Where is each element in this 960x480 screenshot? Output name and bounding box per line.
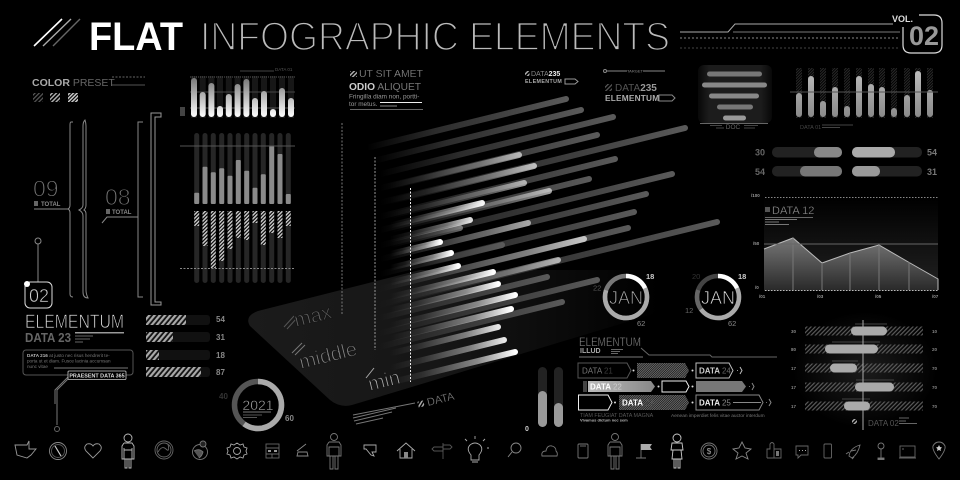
icon: laptop: [899, 446, 916, 458]
total 09: TOTAL: [41, 202, 61, 208]
hatched horizontal bars: 18: [216, 351, 225, 360]
donut jan 1: 18: [646, 272, 654, 281]
icon: cloud: [542, 446, 557, 456]
floating range chart: 17: [791, 385, 797, 390]
totals with brackets: [33, 113, 161, 305]
data235 small: ELEMENTUM: [525, 79, 562, 85]
icon: man figure 2: [608, 434, 622, 469]
icon: map: [15, 441, 36, 458]
volume badge: [680, 14, 942, 53]
volume badge: VOL.: [892, 14, 913, 24]
total 08: TOTAL: [112, 210, 132, 216]
text block: ut sit amet: [349, 68, 424, 110]
two-way pill bars: 30: [755, 148, 765, 158]
area chart: /50: [753, 241, 760, 246]
callout: DATA 216 at justo nec risus hendrerit te-: [27, 353, 110, 358]
icon: rocket: [846, 445, 860, 459]
arrow flow diagram: Vivamus dictum nec sem: [580, 418, 628, 422]
right bar chart: [790, 68, 938, 131]
data235 large: DATA235: [615, 83, 657, 94]
floating range chart: [791, 312, 938, 430]
text block: ut sit amet: UT SIT AMET: [359, 68, 424, 80]
icon: woman figure 1: [122, 434, 134, 468]
vertical gauges: [525, 367, 563, 433]
donut jan 2: 20: [692, 272, 700, 281]
area chart: /03: [817, 294, 824, 299]
right bar chart: DATA 01: [800, 125, 821, 131]
title: INFOGRAPHIC ELEMENTS: [200, 15, 670, 59]
label: max: max: [292, 301, 334, 332]
target marker: [604, 68, 665, 74]
hatched horizontal bars: 54: [216, 315, 225, 324]
icon: globe with pin: [192, 441, 208, 460]
callout: nunc vitae: [27, 364, 48, 369]
text block: ut sit amet: tor metus.: [349, 101, 378, 108]
elementum block: DATA 23: [25, 331, 71, 345]
icon: signpost: [432, 443, 452, 459]
floating range chart: 70: [932, 404, 938, 409]
floating range chart: 30: [791, 329, 797, 334]
floating range chart: 17: [791, 404, 797, 409]
elementum block: ELEMENTUM: [25, 312, 124, 333]
donut 2021: 2021: [242, 397, 274, 413]
color preset: [32, 77, 145, 102]
floating range chart: 70: [932, 385, 938, 390]
area chart: /0: [755, 285, 759, 290]
data235 small: [525, 71, 578, 85]
elementum illud heading: ILLUD: [580, 348, 601, 355]
hatched horizontal bars: 31: [216, 333, 225, 342]
icon: city: [767, 442, 781, 458]
diagonal bright bars: [390, 155, 584, 383]
icon: dollar: $: [707, 447, 712, 456]
donut jan 1: [593, 272, 654, 328]
arrow flow diagram: DATA 25: [699, 398, 731, 408]
donut 2021: 40: [219, 392, 228, 401]
icon: magnifier: [508, 443, 521, 457]
diagonal dark bars: [367, 99, 717, 347]
color preset: COLOR PRESET: [32, 77, 115, 89]
icon: house: [397, 443, 415, 458]
icon: light bulb: [465, 436, 489, 462]
callout: PRAESENT DATA 365: [69, 373, 125, 379]
title: FLAT: [89, 15, 183, 59]
donut jan 2: [685, 272, 746, 328]
icon: building: [266, 444, 279, 458]
floating range chart: 10: [932, 329, 938, 334]
arrow flow diagram: [578, 363, 771, 422]
callout: porta ut et diam. Fusce lacinia accumsan: [27, 358, 111, 364]
donut jan 1: JAN: [609, 288, 643, 308]
icon: man figure 1: [327, 434, 341, 469]
donut 2021: [219, 382, 294, 428]
area chart: /100: [751, 193, 760, 198]
icon: pin marker: [878, 443, 884, 460]
icon: woman figure 2: [671, 434, 683, 468]
icon: hand 2: [364, 445, 376, 456]
funnel chart doc: DOC: [726, 124, 741, 131]
platform: max middle min: [248, 270, 700, 406]
icon: compass: [50, 442, 66, 460]
funnel chart doc: [698, 65, 772, 131]
two-way pill bars: 31: [927, 167, 937, 177]
floating range chart: DATA 02: [868, 419, 899, 428]
donut jan 2: 18: [738, 272, 746, 281]
donut jan 2: JAN: [701, 288, 735, 308]
icon: star: [733, 442, 751, 459]
donut jan 1: 62: [637, 319, 645, 328]
area chart: DATA 12: [772, 205, 814, 217]
label: middle: middle: [297, 338, 359, 374]
donut jan 1: 22: [593, 284, 601, 292]
data235 small: DATA235: [531, 71, 560, 78]
arrow flow diagram: TIAM FEUGIAT DATA MAGNA: [580, 413, 654, 419]
total 09: 09: [33, 176, 59, 202]
elementum block: [25, 312, 124, 345]
top bar chart: DATA 01: [275, 67, 293, 72]
arrow flow diagram: DATA 21: [582, 366, 613, 376]
text block: ut sit amet: Fringilla diam non, portti-: [349, 94, 419, 100]
icon row: [15, 434, 945, 469]
top bar chart: [180, 67, 295, 118]
donut 2021: 60: [285, 414, 294, 423]
icon: tablet: [578, 444, 588, 458]
icon: flag: [636, 444, 652, 458]
area chart: /07: [932, 294, 939, 299]
middle diverging bar chart: [180, 133, 295, 283]
arrow flow diagram: DATA 23: [622, 398, 654, 408]
floating range chart: 17: [791, 366, 797, 371]
dashed guide lines: [342, 123, 410, 382]
icon: phone: [824, 444, 832, 458]
data235 large: [605, 83, 675, 103]
hatched horizontal bars: 87: [216, 368, 225, 377]
arrow flow diagram: Aenean imperdiet felis vitae auctor interdum: [671, 413, 765, 419]
icon: gear: [227, 443, 247, 459]
icon: location marker: [933, 442, 945, 459]
elementum illud heading: ELEMENTUM: [579, 337, 641, 349]
data235 large: ELEMENTUM: [605, 93, 659, 103]
target marker: TARGET: [627, 68, 644, 74]
two-way pill bars: [755, 147, 937, 177]
label: data: DATA: [426, 390, 456, 409]
number node 02: 02: [29, 286, 49, 306]
floating range chart: 70: [932, 366, 938, 371]
volume badge: 02: [909, 21, 939, 51]
area chart: /01: [759, 294, 766, 299]
arrow flow diagram: DATA 22: [590, 382, 622, 392]
icon: globe: [155, 441, 173, 459]
two-way pill bars: 54: [755, 167, 765, 177]
donut jan 2: 62: [728, 319, 736, 328]
number node 02: [24, 238, 52, 308]
text block: ut sit amet: ODIO ALIQUET: [349, 81, 422, 93]
floating range chart: 20: [932, 347, 938, 352]
elementum illud heading: [579, 337, 777, 357]
icon: heart: [85, 444, 101, 458]
label: data: [353, 390, 456, 424]
icon: hand: [297, 444, 308, 456]
icon: chat: [796, 446, 808, 458]
two-way pill bars: 54: [927, 148, 937, 158]
total 08: 08: [105, 184, 131, 210]
callout: [23, 350, 133, 432]
arrow flow diagram: DATA 24: [699, 366, 731, 376]
area chart: [751, 193, 939, 299]
donut jan 2: 12: [685, 306, 693, 315]
hatched horizontal bars: [146, 315, 225, 377]
vertical gauges: 0: [525, 426, 529, 433]
floating range chart: 80: [791, 347, 797, 352]
label: min: min: [366, 367, 402, 396]
icon: dollar: [701, 443, 717, 459]
area chart: /05: [875, 294, 882, 299]
